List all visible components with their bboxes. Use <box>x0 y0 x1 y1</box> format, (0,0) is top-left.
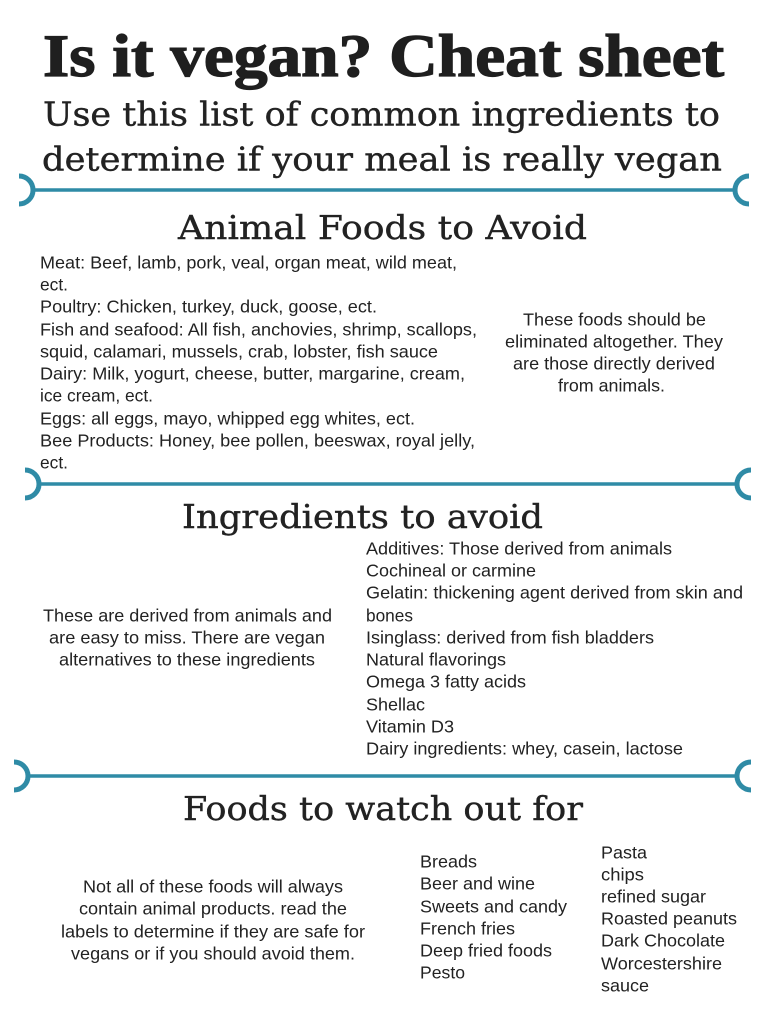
text block: ingredients list: Natural flavorings <box>366 649 506 669</box>
text block: watch list column 1: Pesto <box>420 962 465 982</box>
text block: watch list column 2: refined sugar <box>601 886 706 906</box>
text block: animal foods note: eliminated altogether. They <box>505 331 723 351</box>
text block: animal foods list: ice cream, ect. <box>40 385 153 405</box>
text block: watch list column 2: chips <box>601 864 644 884</box>
text block: ingredients list: Omega 3 fatty acids <box>366 671 526 691</box>
text block: animal foods note: These foods should be <box>523 309 706 329</box>
text block: watch out note <box>61 876 365 963</box>
text block: animal foods list: Bee Products: Honey, bee pollen, beeswax, royal jelly, <box>40 430 475 450</box>
text block: animal foods note: are those directly derived <box>513 353 715 373</box>
text block: watch list column 2: Worcestershire <box>601 953 722 973</box>
text block: ingredients list: Cochineal or carmine <box>366 560 536 580</box>
text block: animal foods list: ect. <box>40 274 68 294</box>
text block: ingredients list: Gelatin: thickening agent derived from skin and <box>366 582 743 602</box>
subtitle: Use this list of common ingredients to <box>43 94 720 134</box>
text block: watch list column 2: Dark Chocolate <box>601 930 725 950</box>
heading: animal foods: Animal Foods to Avoid <box>177 208 587 247</box>
text block: animal foods list: Eggs: all eggs, mayo, whipped egg whites, ect. <box>40 408 415 428</box>
text block: ingredients list: Dairy ingredients: whey, casein, lactose <box>366 738 683 758</box>
text block: animal foods list: Poultry: Chicken, turkey, duck, goose, ect. <box>40 296 377 316</box>
heading: foods to watch: Foods to watch out for <box>183 789 583 828</box>
text block: watch list column 1: Sweets and candy <box>420 896 567 916</box>
text block: ingredients note: These are derived from animals and <box>43 605 332 625</box>
text block: animal foods note: from animals. <box>558 375 665 395</box>
text block: animal foods list: Meat: Beef, lamb, pork, veal, organ meat, wild meat, <box>40 252 457 272</box>
text block: watch list column 2: sauce <box>601 975 649 995</box>
text block: ingredients note <box>43 605 332 669</box>
text block: watch list column 1: Breads <box>420 851 477 871</box>
text block: watch list column 1 <box>420 851 567 982</box>
text block: animal foods list <box>40 252 477 472</box>
text block: ingredients note: are easy to miss. There are vegan <box>49 627 325 647</box>
divider 1 <box>19 176 749 204</box>
text block: animal foods list: squid, calamari, mussels, crab, lobster, fish sauce <box>40 341 438 361</box>
title: Is it vegan? Cheat sheet <box>43 23 724 89</box>
text block: ingredients list: Isinglass: derived from fish bladders <box>366 627 654 647</box>
text block: ingredients list: Vitamin D3 <box>366 716 454 736</box>
heading: ingredients: Ingredients to avoid <box>182 497 543 536</box>
divider 3 <box>14 762 751 790</box>
text block: watch list column 1: Beer and wine <box>420 873 535 893</box>
text block: watch list column 2: Pasta <box>601 842 647 862</box>
text block: watch out note: Not all of these foods will always <box>83 876 343 896</box>
text block: watch list column 1: Deep fried foods <box>420 940 552 960</box>
text block: ingredients list: Shellac <box>366 694 425 714</box>
subtitle <box>42 94 722 178</box>
text block: ingredients list <box>366 538 743 758</box>
text block: animal foods list: Dairy: Milk, yogurt, cheese, butter, margarine, cream, <box>40 363 465 383</box>
text block: watch out note: vegans or if you should avoid them. <box>71 943 355 963</box>
text block: ingredients list: Additives: Those derived from animals <box>366 538 672 558</box>
text block: animal foods note <box>505 309 723 395</box>
text block: animal foods list: ect. <box>40 452 68 472</box>
text block: ingredients note: alternatives to these ingredients <box>59 649 315 669</box>
text block: watch list column 2 <box>601 842 737 995</box>
subtitle: determine if your meal is really vegan <box>42 140 722 178</box>
text block: watch list column 1: French fries <box>420 918 515 938</box>
text block: watch out note: labels to determine if they are safe for <box>61 921 365 941</box>
text block: watch list column 2: Roasted peanuts <box>601 908 737 928</box>
divider 2 <box>25 470 751 498</box>
text block: ingredients list: bones <box>366 605 413 625</box>
text block: animal foods list: Fish and seafood: All fish, anchovies, shrimp, scallops, <box>40 319 477 339</box>
text block: watch out note: contain animal products. read the <box>79 898 347 918</box>
